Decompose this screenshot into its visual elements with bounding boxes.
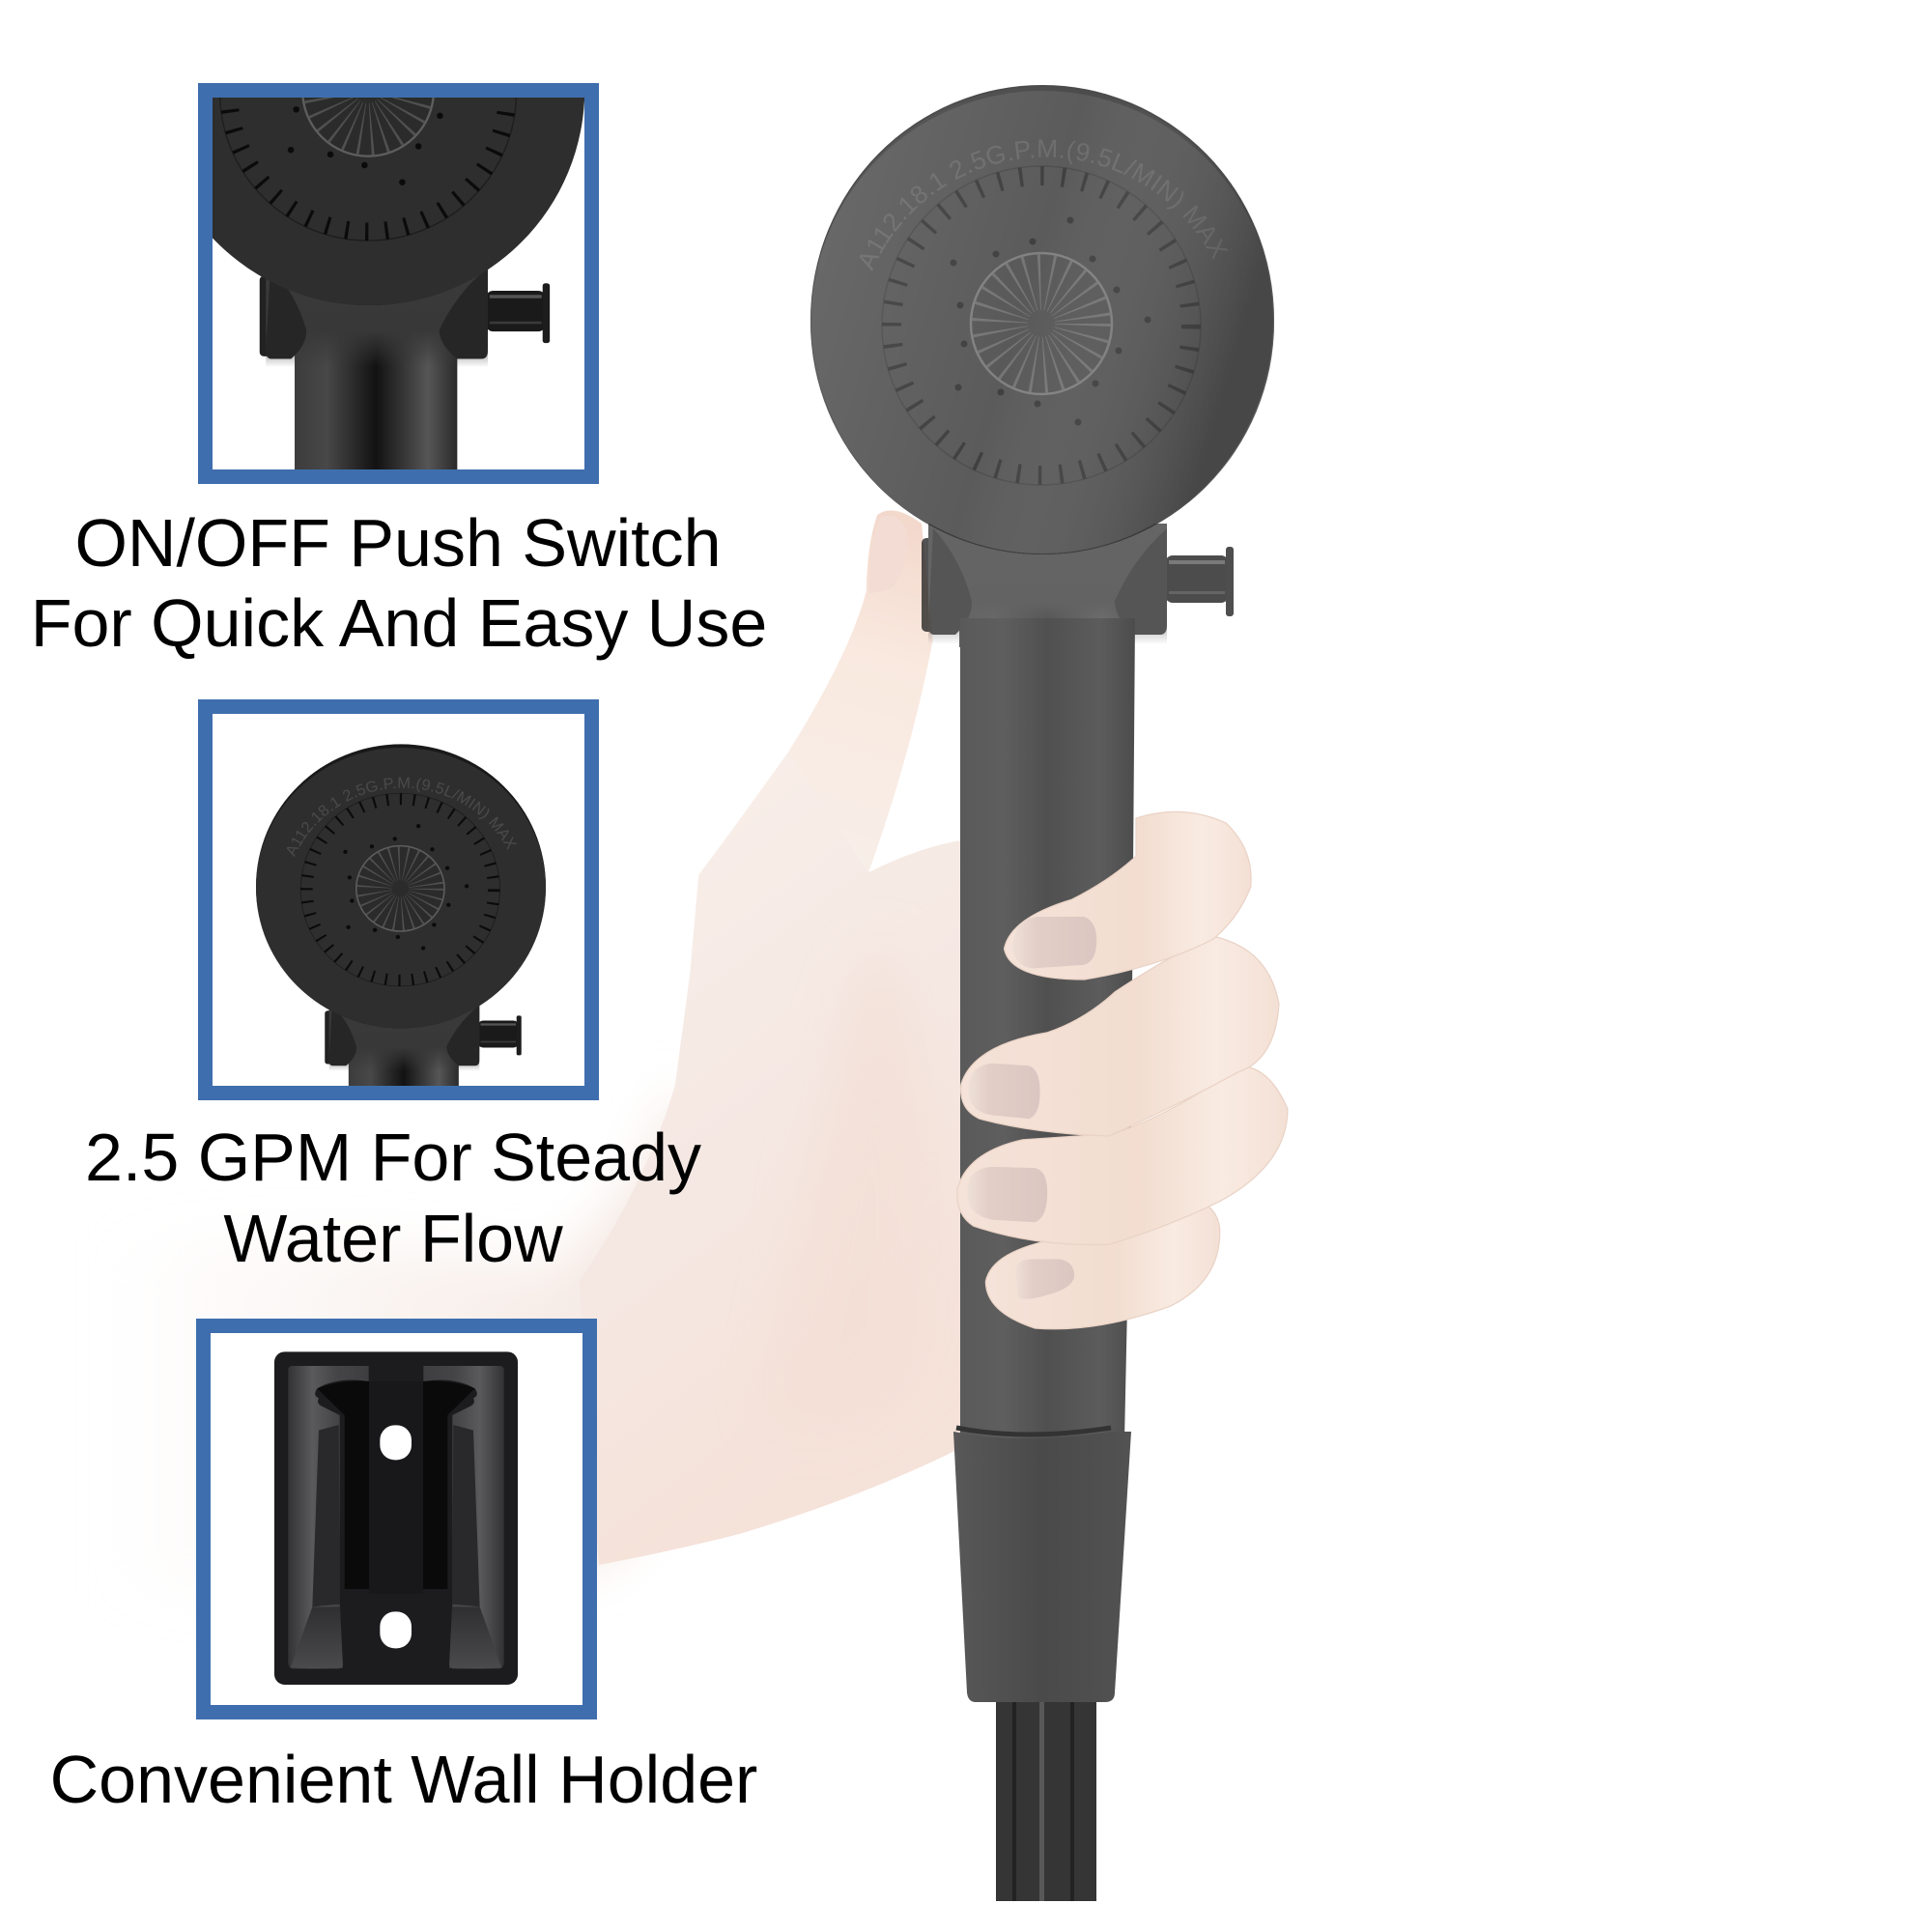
close-up of shower face <box>256 744 546 1086</box>
heading: Convenient Wall Holder <box>50 1742 757 1817</box>
hand holding the shower <box>104 510 961 1593</box>
handle shaft <box>960 618 1135 1441</box>
palm shading <box>764 936 931 1427</box>
icon: wall holder <box>274 1351 518 1685</box>
little finger <box>985 1198 1220 1329</box>
palm <box>579 752 961 1565</box>
main shower face <box>812 88 1272 554</box>
face shading <box>811 87 1273 554</box>
subheading: For Quick And Easy Use <box>31 585 767 661</box>
panel: 2.5 GPM <box>85 699 701 1276</box>
middle finger <box>961 936 1279 1136</box>
index finger <box>1005 811 1251 980</box>
wrist fading to the left <box>104 1084 788 1593</box>
embossed flow text: A112.18.1 2.5G.P.M.(9.5L/MIN) MAX <box>286 777 517 857</box>
thumb <box>788 510 933 872</box>
inset frame <box>203 1325 589 1712</box>
embossed flow text: A112.18.1 2.5G.P.M.(9.5L/MIN) MAX <box>860 139 1229 270</box>
shower handle and hose <box>810 85 1289 1901</box>
ring finger <box>957 1065 1288 1245</box>
panel: wall holder <box>50 1325 757 1817</box>
hose <box>996 1700 1096 1901</box>
close-up of switch <box>213 98 584 469</box>
neck with push switch <box>922 524 1234 647</box>
hose collar <box>953 1432 1131 1702</box>
fingers wrapped around the handle <box>957 811 1288 1329</box>
inset frame <box>205 707 591 1094</box>
panel: on/off push switch <box>37 83 765 661</box>
heading: 2.5 GPM For Steady <box>85 1120 701 1195</box>
collar lip <box>956 1428 1111 1435</box>
thumb nail side <box>868 516 907 594</box>
subheading: Water Flow <box>223 1201 563 1276</box>
inset frame <box>205 91 591 477</box>
heading: ON/OFF Push Switch <box>74 505 722 581</box>
